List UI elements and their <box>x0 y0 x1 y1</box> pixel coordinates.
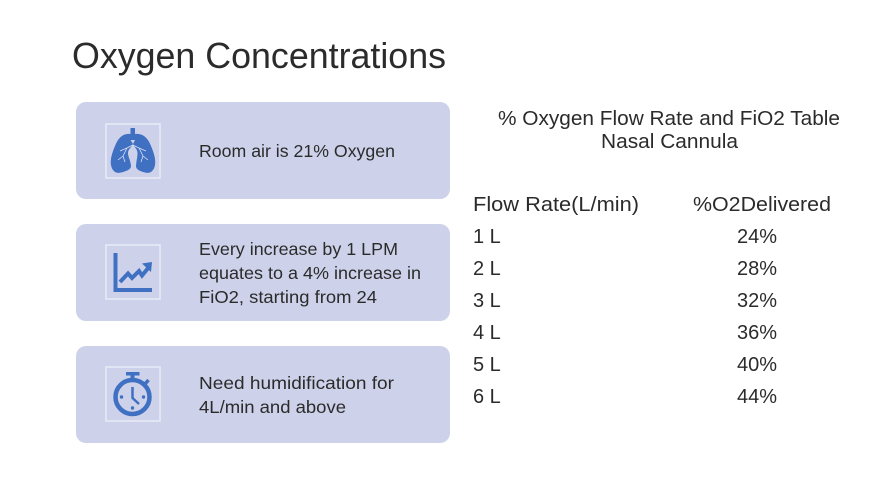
text: humidification: 4L/min and above <box>199 397 346 417</box>
text: LPM increase: FiO2, starting from 24 <box>199 287 377 307</box>
table heading: Nasal Cannula <box>601 131 739 153</box>
panel: humidification <box>76 346 450 443</box>
table heading <box>498 108 840 153</box>
table: flow rate and FiO2: 6 L <box>473 386 501 408</box>
table: flow rate and FiO2: 44% <box>737 386 777 408</box>
table: flow rate and FiO2: 3 L <box>473 290 501 312</box>
title: Oxygen Concentrations <box>72 35 446 76</box>
table: flow rate and FiO2: 2 L <box>473 258 501 280</box>
table: flow rate and FiO2: 32% <box>737 290 777 312</box>
icon: rising chart <box>106 245 160 299</box>
table heading: % Oxygen Flow Rate and FiO2 Table <box>498 108 840 130</box>
table: flow rate and FiO2: 36% <box>737 322 777 344</box>
table: flow rate and FiO2 <box>473 194 831 408</box>
text: LPM increase: equates to a 4% increase in <box>199 263 421 283</box>
text: humidification: Need humidification for <box>199 373 394 393</box>
text: room air: Room air is 21% Oxygen <box>199 141 395 161</box>
table: flow rate and FiO2: Flow Rate(L/min) <box>473 194 639 216</box>
table: flow rate and FiO2: 1 L <box>473 226 501 248</box>
table: flow rate and FiO2: 5 L <box>473 354 501 376</box>
table: flow rate and FiO2: 4 L <box>473 322 501 344</box>
table: flow rate and FiO2: %O2Delivered <box>693 194 831 216</box>
panel: room air <box>76 102 450 199</box>
text: humidification <box>199 373 394 417</box>
panel: LPM increase <box>76 224 450 321</box>
table: flow rate and FiO2: 24% <box>737 226 777 248</box>
icon: stopwatch <box>106 367 160 421</box>
text: LPM increase <box>199 239 421 307</box>
table: flow rate and FiO2: 40% <box>737 354 777 376</box>
table: flow rate and FiO2: 28% <box>737 258 777 280</box>
icon: lungs <box>106 124 160 178</box>
text: LPM increase: Every increase by 1 LPM <box>199 239 398 259</box>
